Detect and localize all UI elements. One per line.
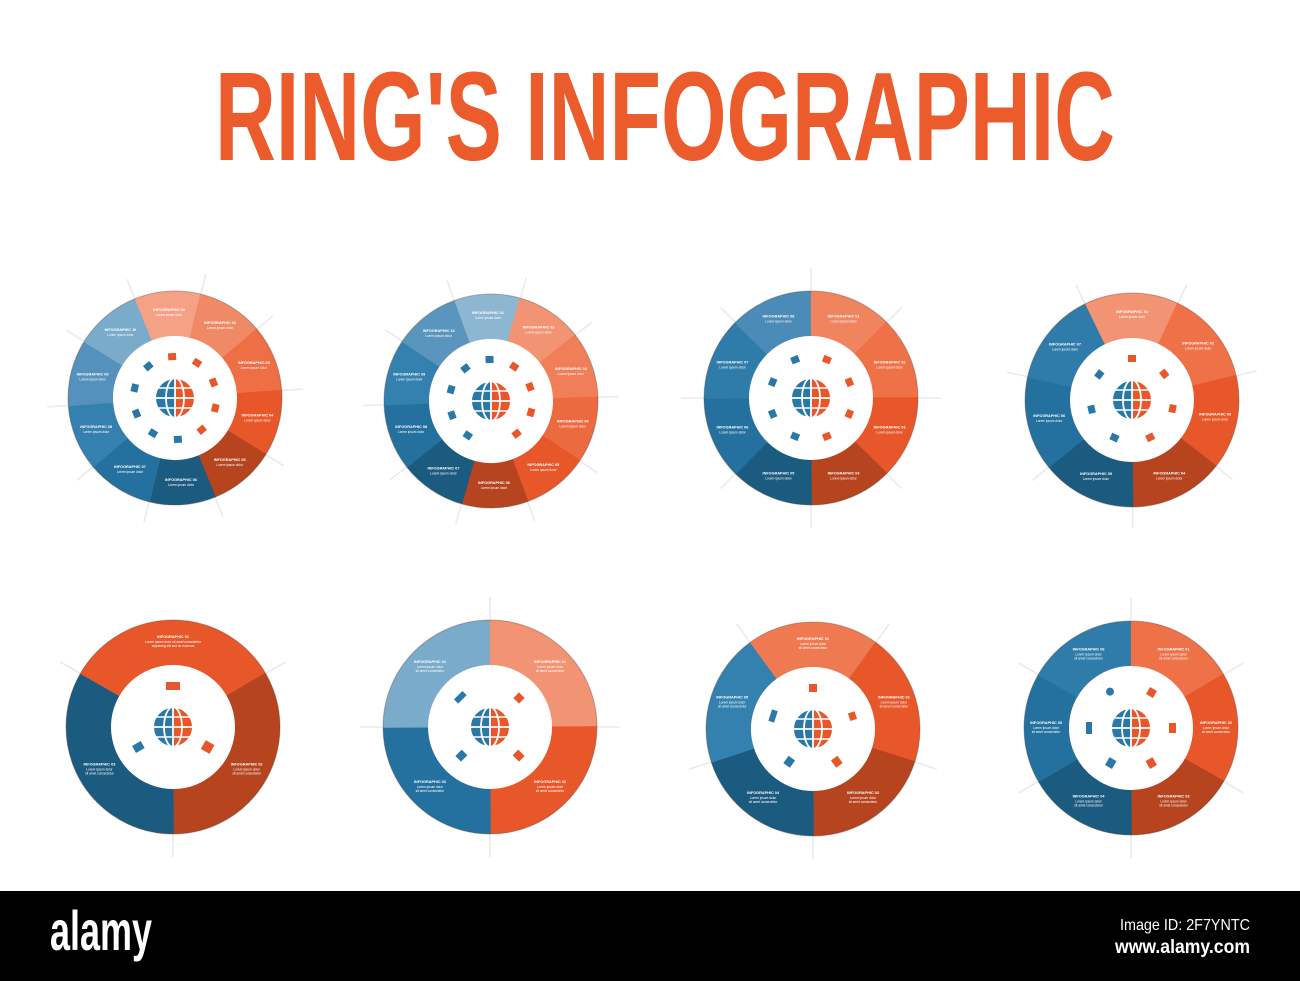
labels (1030, 647, 1232, 808)
footer bar (0, 891, 1300, 981)
labels: INFOGRAPHIC 07 (717, 360, 748, 364)
globe (1111, 708, 1151, 748)
labels: sit amet consectetur (849, 800, 878, 804)
labels: Lorem ipsum dolor (719, 431, 747, 435)
globe (153, 707, 193, 747)
labels (83, 635, 263, 776)
labels: INFOGRAPHIC 04 (557, 419, 590, 423)
labels: INFOGRAPHIC 02 (1182, 342, 1214, 346)
labels: INFOGRAPHIC 03 (238, 361, 270, 365)
labels: INFOGRAPHIC 05 (527, 463, 559, 467)
labels: sit amet consectetur (536, 669, 565, 673)
labels: sit amet consectetur (232, 772, 262, 776)
labels: Lorem ipsum dolor (1075, 652, 1103, 656)
labels: INFOGRAPHIC 01 (157, 635, 189, 639)
labels: Lorem ipsum dolor (765, 477, 793, 481)
labels: Lorem ipsum dolor (430, 471, 458, 475)
labels: INFOGRAPHIC 03 (1199, 413, 1231, 417)
labels: INFOGRAPHIC 03 (1158, 795, 1189, 799)
labels: sit amet consectetur (536, 789, 565, 793)
labels: Lorem ipsum dolor (233, 768, 261, 772)
ring 1: ten segments (47, 274, 303, 522)
labels: sit amet consectetur (1159, 804, 1189, 808)
labels: Lorem ipsum dolor (525, 331, 553, 335)
labels: INFOGRAPHIC 09 (77, 372, 108, 376)
labels: Lorem ipsum dolor (800, 642, 827, 646)
icons (454, 691, 525, 762)
labels: INFOGRAPHIC 09 (393, 373, 425, 377)
labels: INFOGRAPHIC 03 (555, 367, 587, 371)
labels: sit amet consectetur (85, 772, 115, 776)
labels (1033, 310, 1231, 481)
labels: INFOGRAPHIC 08 (395, 425, 427, 429)
labels (716, 637, 910, 804)
globe (791, 378, 831, 418)
labels (393, 311, 590, 490)
labels: Lorem ipsum dolor (396, 378, 423, 382)
labels: Lorem ipsum dolor (156, 313, 183, 317)
labels: Lorem ipsum dolor (398, 430, 425, 434)
labels: Lorem ipsum dolor (1156, 476, 1183, 480)
labels: sit amet consectetur (1032, 730, 1061, 734)
labels: Lorem ipsum dolor (475, 316, 502, 320)
labels: sit amet consectetur (416, 669, 445, 673)
labels: Lorem ipsum dolor (168, 483, 195, 487)
labels: INFOGRAPHIC 02 (523, 326, 554, 330)
ring 3: eight segments (681, 268, 941, 528)
labels: sit amet consectetur (1074, 656, 1104, 660)
labels: Lorem ipsum dolor (830, 319, 858, 323)
labels: Lorem ipsum dolor (765, 319, 793, 323)
labels: Lorem ipsum dolor (881, 701, 908, 705)
ring 8: six segments (1016, 598, 1246, 858)
labels: INFOGRAPHIC 05 (1030, 721, 1062, 725)
ring 4: seven segments (1007, 281, 1257, 528)
labels: INFOGRAPHIC 06 (717, 426, 748, 430)
labels: INFOGRAPHIC 01 (828, 314, 859, 318)
labels: Lorem ipsum dolor (1052, 348, 1079, 352)
labels (77, 308, 274, 487)
labels: Lorem ipsum dolor (719, 701, 746, 705)
labels: INFOGRAPHIC 01 (153, 308, 185, 312)
labels: INFOGRAPHIC 06 (478, 481, 510, 485)
labels: Lorem ipsum dolor (244, 419, 272, 423)
labels: INFOGRAPHIC 10 (423, 329, 455, 333)
icons (130, 353, 220, 443)
labels: Lorem ipsum dolor (1119, 315, 1146, 319)
labels: Lorem ipsum dolor (560, 424, 587, 428)
labels: INFOGRAPHIC 06 (165, 478, 197, 482)
labels: INFOGRAPHIC 05 (716, 696, 748, 700)
labels: INFOGRAPHIC 03 (83, 762, 115, 766)
icons (1086, 686, 1176, 769)
icons (447, 356, 535, 441)
labels: Lorem ipsum dolor (417, 665, 444, 669)
labels: INFOGRAPHIC 05 (1080, 472, 1112, 476)
labels: Lorem ipsum dolor (86, 768, 114, 772)
labels: Lorem ipsum dolor (1203, 726, 1230, 730)
labels: INFOGRAPHIC 07 (1049, 343, 1081, 347)
labels: INFOGRAPHIC 07 (114, 465, 146, 469)
icons (768, 355, 854, 441)
labels: INFOGRAPHIC 02 (204, 321, 236, 325)
labels: Lorem ipsum dolor (107, 333, 134, 337)
icons (1087, 355, 1177, 442)
labels: Lorem ipsum dolor (79, 377, 107, 381)
labels: Lorem ipsum dolor (558, 372, 585, 376)
labels: INFOGRAPHIC 02 (231, 762, 263, 766)
labels: INFOGRAPHIC 04 (1153, 471, 1186, 475)
icons (768, 684, 857, 768)
globe (471, 381, 511, 421)
ring 7: five segments (689, 611, 937, 859)
labels: Lorem ipsum dolor (1036, 419, 1063, 423)
icons (132, 682, 214, 754)
labels: Lorem ipsum dolor (1075, 800, 1103, 804)
labels: sit amet consectetur (1159, 656, 1189, 660)
labels: Lorem ipsum dolor (719, 365, 747, 369)
globe (793, 709, 833, 749)
labels: Lorem ipsum dolor (216, 463, 244, 467)
labels: INFOGRAPHIC 01 (1116, 310, 1148, 314)
labels: INFOGRAPHIC 08 (763, 314, 794, 318)
labels: Lorem ipsum dolor sit amet consectetur (145, 640, 202, 644)
ring 2: ten segments (363, 278, 619, 524)
labels: sit amet consectetur (749, 800, 778, 804)
labels: sit amet consectetur (799, 646, 828, 650)
globe (470, 707, 510, 747)
labels: INFOGRAPHIC 05 (763, 472, 794, 476)
labels (414, 660, 566, 793)
labels: INFOGRAPHIC 02 (874, 360, 905, 364)
labels: INFOGRAPHIC 02 (534, 780, 566, 784)
labels: INFOGRAPHIC 04 (414, 660, 447, 664)
labels: INFOGRAPHIC 03 (414, 780, 446, 784)
labels: Lorem ipsum dolor (830, 477, 858, 481)
labels: Lorem ipsum dolor (1160, 652, 1188, 656)
labels: Lorem ipsum dolor (537, 665, 564, 669)
labels: INFOGRAPHIC 06 (1033, 414, 1065, 418)
labels (717, 314, 905, 481)
labels: Lorem ipsum dolor (1160, 800, 1188, 804)
ring 6: four segments (360, 597, 620, 857)
labels: Lorem ipsum dolor (750, 796, 777, 800)
labels: INFOGRAPHIC 04 (1073, 795, 1105, 799)
labels: INFOGRAPHIC 03 (874, 426, 905, 430)
labels: INFOGRAPHIC 01 (797, 637, 829, 641)
labels: INFOGRAPHIC 01 (534, 660, 566, 664)
labels: INFOGRAPHIC 07 (428, 466, 459, 470)
labels: INFOGRAPHIC 04 (828, 472, 860, 476)
labels: INFOGRAPHIC 08 (80, 425, 112, 429)
labels: sit amet consectetur (1202, 730, 1231, 734)
labels: Lorem ipsum dolor (876, 365, 904, 369)
image id: Image ID: 2F7YNTC (1120, 917, 1250, 934)
labels: sit amet consectetur (718, 705, 747, 709)
labels: INFOGRAPHIC 10 (104, 328, 136, 332)
labels: Lorem ipsum dolor (1185, 347, 1212, 351)
labels: INFOGRAPHIC 02 (1200, 721, 1232, 725)
labels: Lorem ipsum dolor (83, 430, 110, 434)
labels: Lorem ipsum dolor (1202, 418, 1229, 422)
labels: sit amet consectetur (880, 705, 909, 709)
labels: INFOGRAPHIC 04 (747, 791, 780, 795)
globe (155, 378, 195, 418)
labels: Lorem ipsum dolor (1083, 477, 1110, 481)
labels: sit amet consectetur (1074, 804, 1104, 808)
labels: INFOGRAPHIC 04 (242, 414, 274, 418)
labels: Lorem ipsum dolor (417, 785, 444, 789)
globe (1112, 380, 1152, 420)
labels: Lorem ipsum dolor (530, 468, 557, 472)
labels: INFOGRAPHIC 01 (472, 311, 504, 315)
labels: INFOGRAPHIC 02 (878, 696, 910, 700)
labels: sit amet consectetur (416, 789, 445, 793)
labels: INFOGRAPHIC 06 (1073, 647, 1104, 651)
labels: Lorem ipsum dolor (850, 796, 877, 800)
labels: Lorem ipsum dolor (537, 785, 564, 789)
labels: Lorem ipsum dolor (241, 366, 268, 370)
labels: Lorem ipsum dolor (1033, 726, 1060, 730)
labels: Lorem ipsum dolor (425, 334, 453, 338)
labels: Lorem ipsum dolor (117, 470, 144, 474)
url: www.alamy.com (1114, 937, 1250, 958)
labels: INFOGRAPHIC 01 (1158, 647, 1189, 651)
labels: Lorem ipsum dolor (481, 486, 508, 490)
labels: Lorem ipsum dolor (876, 431, 904, 435)
labels: Lorem ipsum dolor (207, 326, 234, 330)
ring 5: three segments (58, 612, 288, 857)
labels: adipiscing elit sed do eiusmod (152, 644, 194, 648)
labels: INFOGRAPHIC 05 (214, 458, 246, 462)
alamy logo: alamy (50, 899, 152, 962)
labels: INFOGRAPHIC 03 (847, 791, 879, 795)
